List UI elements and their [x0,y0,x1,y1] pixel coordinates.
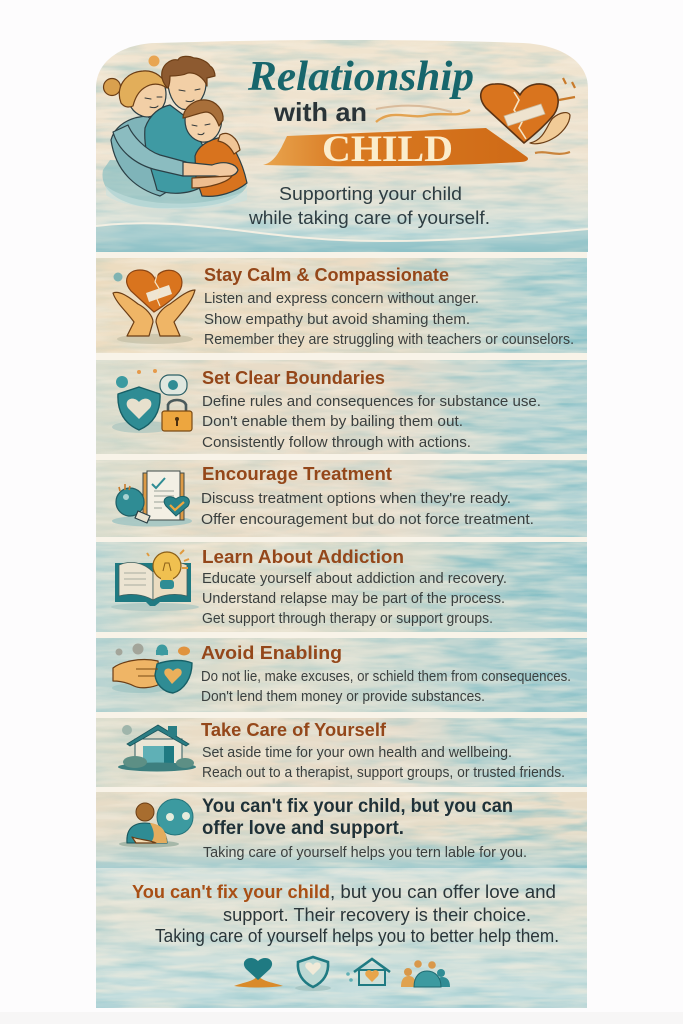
mother [104,71,170,196]
text block: Define rules and consequences for substance use. [202,394,541,410]
text block: Remember they are struggling with teachers or counselors. [204,332,574,348]
text block: Discuss treatment options when they're ready. [201,491,511,507]
text block: Get support through therapy or support groups. [202,611,493,627]
subtitle: Supporting your child [279,184,462,204]
icon: heart over hands [234,958,283,988]
icon: hands holding heart [113,270,195,344]
icon: bandaged heart in hand [481,78,575,154]
text block: Set aside time for your own health and wellbeing. [202,745,512,761]
child [183,100,247,196]
text block [201,669,571,705]
panel: closing message [96,868,587,1008]
text block [202,571,507,627]
closing text: Taking care of yourself helps you to better help them. [155,925,559,946]
title: with an: with an [273,97,367,127]
closing text: support. Their recovery is their choice. [223,904,531,925]
icon: house [118,725,196,772]
closing text: , but you can offer love and [330,881,556,902]
statement [202,796,527,861]
text block: Educate yourself about addiction and recovery. [202,571,507,587]
icon: house with heart [346,959,390,985]
panel: Avoid Enabling [96,638,587,712]
panel: Take Care of Yourself [96,718,587,787]
text block [201,491,534,528]
text block: Offer encouragement but do not force treatment. [201,512,534,528]
text block: Do not lie, make excuses, or schield them from consequences. [201,669,571,685]
text block: Consistently follow through with actions. [202,435,471,451]
statement: Taking care of yourself helps you tern lable for you. [203,845,527,861]
subtitle: while taking care of yourself. [248,208,490,228]
icon: clipboard, pills and heart [112,471,192,526]
icon: hand with shield [112,644,192,693]
title: CHILD: CHILD [322,129,453,170]
panel: Learn About Addiction [96,542,587,632]
heading: Set Clear Boundaries [202,368,385,388]
text block: Reach out to a therapist, support groups, or trusted friends. [202,765,565,781]
statement: You can't fix your child, but you can [202,796,513,817]
heading: Learn About Addiction [202,547,404,567]
statement: offer love and support. [202,818,404,839]
text block: Listen and express concern without anger. [204,291,479,307]
decorative ribbon: orange swash [263,106,528,166]
title [247,54,528,170]
text block: Understand relapse may be part of the process. [202,591,505,607]
heading: Take Care of Yourself [201,720,387,740]
panel: header [96,39,588,252]
icon: shield and lock [112,369,192,433]
text block: Don't enable them by bailing them out. [202,414,463,430]
text block [202,394,541,451]
icon: person hugging and globe [119,799,193,848]
icon row [234,957,450,991]
panel: Set Clear Boundaries [96,360,587,454]
closing text: You can't fix your child [132,881,330,902]
heading: Encourage Treatment [202,464,392,484]
text block: Don't lend them money or provide substances. [201,689,485,705]
text block [202,745,565,781]
subtitle [248,184,490,228]
panel: Stay Calm & Compassionate [96,258,587,353]
panel: Encourage Treatment [96,460,587,537]
heading: Stay Calm & Compassionate [204,265,449,285]
panel: You can't fix your child [96,792,587,868]
title: Relationship: Relationship [247,54,474,100]
arms [113,125,238,188]
text block: Show empathy but avoid shaming them. [204,312,470,328]
father [145,56,215,193]
icon: group of people [401,960,450,987]
icon: open book and light bulb [111,550,199,611]
illustration: family embrace [102,56,247,209]
icon: shield [295,957,331,991]
text block [204,291,574,348]
closing text [132,881,559,946]
heading: Avoid Enabling [201,643,342,663]
